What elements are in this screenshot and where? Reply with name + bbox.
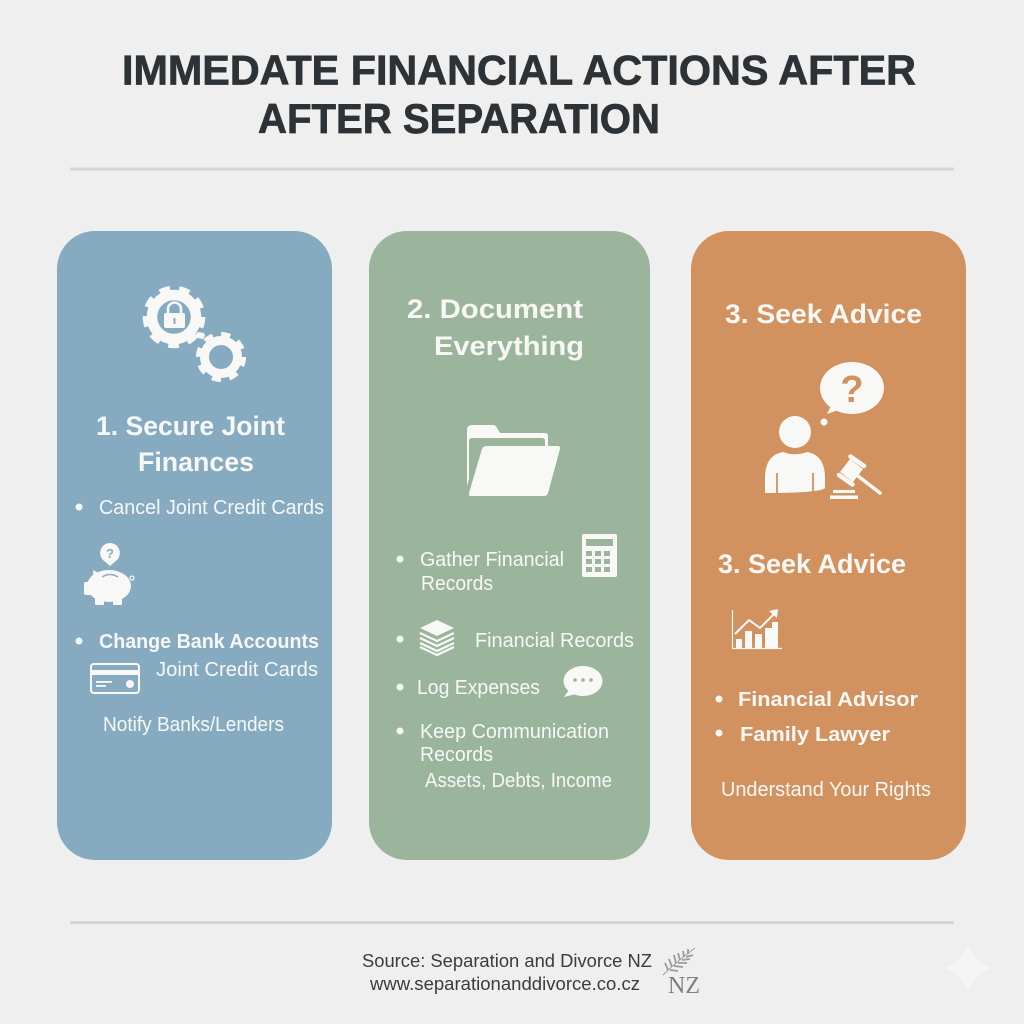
text: financial records: Financial Records	[475, 630, 634, 652]
title: AFTER SEPARATION	[258, 95, 660, 142]
bullet: gather financial records: Gather Financial	[420, 549, 564, 571]
icon: growth chart	[732, 609, 782, 648]
text: assets debts income: Assets, Debts, Income	[425, 770, 612, 792]
bullet: gather financial records	[396, 549, 564, 595]
bullet: keep communication records: Records	[420, 744, 493, 766]
icon: stacked documents	[420, 620, 454, 655]
bullet: change bank accounts: Change Bank Accounts	[99, 630, 319, 653]
bullet: keep communication records	[396, 721, 609, 766]
bullet: family lawyer: Family Lawyer	[740, 723, 890, 746]
heading: secure joint finances	[96, 411, 285, 477]
title: IMMEDATE FINANCIAL ACTIONS AFTER	[122, 46, 916, 94]
icon: credit card	[91, 664, 139, 693]
heading: document everything: Everything	[434, 331, 584, 361]
heading: seek advice repeat: 3. Seek Advice	[718, 549, 906, 579]
bullet: financial advisor: Financial Advisor	[738, 688, 918, 711]
icon: calculator	[582, 534, 617, 577]
icon: fern NZ logo	[663, 948, 700, 999]
panel: secure joint finances	[57, 231, 332, 860]
bullet dot: financial records	[396, 636, 404, 642]
icon: person with question and gavel	[765, 362, 884, 499]
icon: fern NZ logo: NZ	[668, 973, 700, 999]
icon: sparkle watermark	[943, 943, 993, 993]
text: understand your rights: Understand Your Rights	[721, 779, 931, 801]
source text	[362, 950, 652, 994]
icon: folder	[467, 425, 560, 496]
bullet: keep communication records: Keep Communication	[420, 721, 609, 743]
heading: document everything: 2. Document	[407, 294, 583, 324]
icon: piggy bank	[84, 543, 134, 605]
heading: seek advice: 3. Seek Advice	[725, 299, 922, 329]
heading: secure joint finances: Finances	[138, 447, 254, 477]
source text: www.separationanddivorce.co.cz	[369, 973, 640, 994]
heading: secure joint finances: 1. Secure Joint	[96, 411, 285, 441]
bullet: gather financial records: Records	[421, 573, 493, 595]
text: joint credit cards: Joint Credit Cards	[156, 659, 318, 681]
title	[122, 46, 916, 142]
icon: speech bubble	[564, 666, 602, 697]
icon: person with question and gavel: ?	[840, 369, 864, 411]
panel: document everything	[369, 231, 650, 860]
bullet: cancel joint credit cards: Cancel Joint Credit Cards	[99, 497, 324, 519]
icon: gears with padlock	[146, 289, 243, 379]
heading: document everything	[407, 294, 584, 361]
icon: piggy bank: ?	[106, 546, 114, 561]
bullet: log expenses: Log Expenses	[417, 677, 540, 699]
panel: seek advice	[691, 231, 966, 860]
source text: Source: Separation and Divorce NZ	[362, 950, 652, 971]
text: notify banks: Notify Banks/Lenders	[103, 714, 284, 736]
